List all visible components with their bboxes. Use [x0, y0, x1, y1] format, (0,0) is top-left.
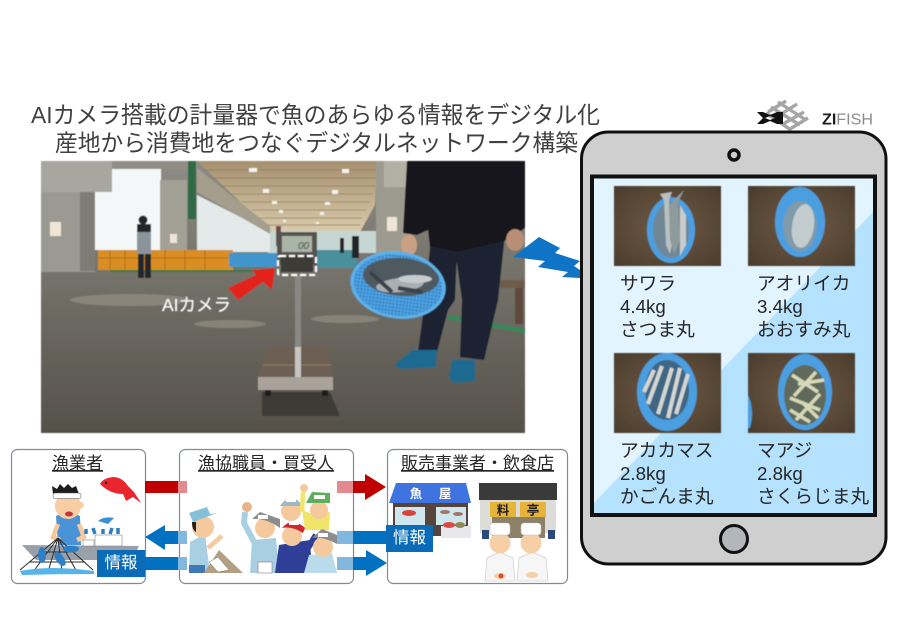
scale: 00 [298, 241, 310, 252]
camera [729, 150, 739, 160]
fish card: サワラ [614, 186, 721, 340]
fish card: アオリイカ: アオリイカ [757, 273, 850, 294]
home button [720, 526, 748, 552]
heading: 漁業者 [52, 454, 103, 473]
fish card: アカカマス: 2.8kg [620, 463, 666, 484]
buyer: top [280, 498, 303, 521]
hose [448, 317, 525, 331]
icon: two chefs [485, 523, 548, 581]
arrow: blue, fisher to staff [145, 557, 187, 570]
title: 産地から消費地をつなぐデジタルネットワーク構築 [55, 130, 578, 156]
buyer: left [242, 502, 280, 573]
fish card: マアジ: さくらじま丸 [757, 486, 869, 507]
connection bolt [513, 237, 580, 278]
fish card: マアジ: 2.8kg [757, 463, 803, 484]
tag: 情報 seller: 情報 [393, 528, 426, 547]
background people [137, 216, 359, 278]
fish card: マアジ: マアジ [757, 440, 812, 461]
fish card: アカカマス: アカカマス [620, 440, 713, 461]
person with basket [394, 161, 525, 383]
heading: 漁協職員・買受人 [198, 454, 334, 473]
fish card: アオリイカ: 3.4kg [757, 296, 803, 317]
title: AIカメラ搭載の計量器で魚のあらゆる情報をデジタル化 [31, 102, 600, 128]
tag: 情報 fisher [97, 550, 145, 577]
icon: restaurant [479, 483, 557, 539]
arrow: blue, sellers to staff [337, 531, 387, 544]
buyer: green cap [300, 484, 330, 530]
arrow: red, fisher to staff [145, 481, 187, 493]
logo: ZIFISH: ZIFISH [822, 112, 873, 128]
heading: 販売事業者・飲食店 [401, 454, 554, 473]
arrow: red, staff to sellers [337, 474, 386, 500]
title [31, 102, 600, 156]
fish card: アカカマス [614, 353, 721, 507]
fish card: サワラ: さつま丸 [620, 319, 695, 340]
floor wet patches [70, 294, 379, 328]
fish card: サワラ: 4.4kg [620, 296, 666, 317]
panel: 漁業者 [12, 450, 146, 584]
ceiling [197, 161, 377, 232]
fish card: アオリイカ [748, 186, 855, 340]
buyer: center with red cap [275, 521, 316, 573]
icon: restaurant: 料 [497, 502, 510, 518]
fish card: マアジ [748, 353, 869, 507]
panel: 販売事業者・飲食店 [388, 450, 568, 584]
photo: fish market scale [41, 161, 525, 433]
tag: 情報 fisher: 情報 [104, 553, 138, 572]
icon: group of buyers [242, 484, 337, 573]
fish card: アカカマス: かごんま丸 [620, 486, 714, 507]
icon: restaurant: 亭 [527, 502, 539, 518]
red arrow [228, 268, 275, 300]
AI camera dashed box [278, 256, 316, 275]
logo: ZIFISH [757, 101, 873, 130]
icon: fisherman on boat [20, 484, 139, 575]
tag: 情報 seller [386, 525, 433, 552]
icon: red sea bream [100, 477, 141, 503]
orange crates [98, 250, 233, 270]
screen [592, 176, 875, 515]
blue crates [229, 253, 277, 267]
arrow: blue, staff to fisher [145, 525, 187, 550]
fish card: サワラ: サワラ [620, 273, 676, 294]
panel: 漁協職員・買受人 [180, 450, 354, 584]
icon: fish shop [389, 483, 471, 538]
scale [258, 232, 340, 416]
basket with fish [346, 246, 450, 324]
icon: inspector with clipboard [189, 507, 243, 573]
tablet [582, 132, 886, 564]
buyer: right front [304, 529, 337, 573]
AI camera label: AIカメラ [162, 295, 231, 315]
icon: fish shop: 屋 [439, 487, 451, 501]
arrow: blue, staff to sellers [337, 550, 387, 576]
icon: fish shop: 魚 [410, 486, 423, 501]
fish card: アオリイカ: おおすみ丸 [757, 319, 851, 340]
